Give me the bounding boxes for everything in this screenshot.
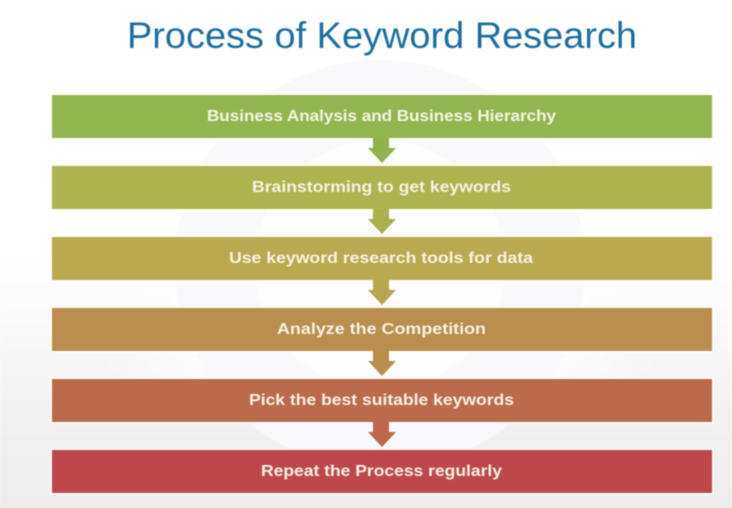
step 1 <box>52 95 712 138</box>
step 6 <box>52 450 712 493</box>
step 5 <box>52 379 712 422</box>
step 1: Business Analysis and Business Hierarchy <box>207 108 556 125</box>
step 4 <box>52 308 712 351</box>
step 4: Analyze the Competition <box>277 321 486 338</box>
arrow: step 1 to 2 <box>368 138 396 163</box>
step 2 <box>52 166 712 209</box>
arrow: step 4 to 5 <box>368 351 396 376</box>
step 3: Use keyword research tools for data <box>229 250 533 267</box>
step 6: Repeat the Process regularly <box>261 463 502 480</box>
watermark <box>175 60 585 470</box>
step 3 <box>52 237 712 280</box>
step 2: Brainstorming to get keywords <box>252 179 511 196</box>
arrow: step 2 to 3 <box>368 209 396 234</box>
title: Process of Keyword Research <box>127 15 637 56</box>
arrow: step 5 to 6 <box>368 422 396 447</box>
step 5: Pick the best suitable keywords <box>249 392 514 409</box>
arrow: step 3 to 4 <box>368 280 396 305</box>
